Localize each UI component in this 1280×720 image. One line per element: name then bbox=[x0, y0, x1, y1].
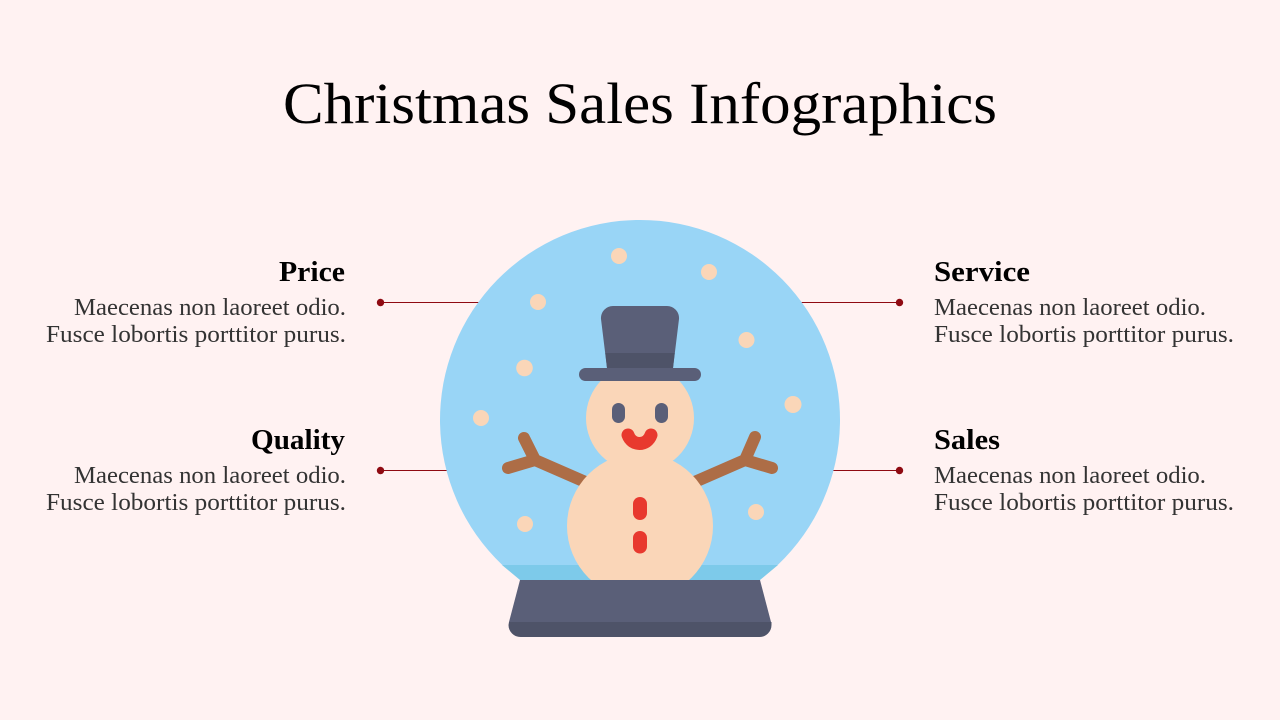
title: Christmas Sales Infographics bbox=[283, 71, 997, 136]
snowman mouth bbox=[628, 435, 651, 443]
quality heading: Quality bbox=[251, 425, 345, 456]
globe glass bbox=[440, 220, 840, 565]
service text: Fusce lobortis porttitor purus. bbox=[934, 322, 1234, 348]
sales text bbox=[934, 463, 1234, 516]
service heading: Service bbox=[934, 257, 1030, 288]
panel: sales bbox=[831, 425, 1234, 516]
snowman buttons bbox=[633, 497, 647, 554]
sales text: Fusce lobortis porttitor purus. bbox=[934, 490, 1234, 516]
service connector bbox=[798, 299, 903, 306]
icon: snow globe bbox=[440, 220, 840, 637]
quality text bbox=[46, 463, 346, 516]
price text bbox=[46, 295, 346, 348]
panel: service bbox=[798, 257, 1234, 348]
globe base bbox=[508, 580, 772, 637]
snowman head bbox=[586, 364, 694, 472]
snowman eyes bbox=[612, 403, 668, 423]
globe lower band bbox=[502, 565, 778, 580]
snowman right arm bbox=[690, 437, 772, 484]
quality text: Fusce lobortis porttitor purus. bbox=[46, 490, 346, 516]
sales text: Maecenas non laoreet odio. bbox=[934, 463, 1206, 489]
sales heading: Sales bbox=[934, 425, 1000, 456]
snowman left arm bbox=[508, 438, 590, 484]
top hat bbox=[579, 306, 701, 381]
service text bbox=[934, 295, 1234, 348]
quality text: Maecenas non laoreet odio. bbox=[74, 463, 346, 489]
price heading: Price bbox=[279, 257, 345, 288]
sales connector bbox=[831, 467, 903, 474]
price connector bbox=[377, 299, 482, 306]
service text: Maecenas non laoreet odio. bbox=[934, 295, 1206, 321]
panel: quality bbox=[46, 425, 449, 516]
snowflakes bbox=[473, 248, 802, 532]
panel: price bbox=[46, 257, 482, 348]
quality connector bbox=[377, 467, 449, 474]
snowman body bbox=[567, 453, 713, 599]
price text: Fusce lobortis porttitor purus. bbox=[46, 322, 346, 348]
price text: Maecenas non laoreet odio. bbox=[74, 295, 346, 321]
